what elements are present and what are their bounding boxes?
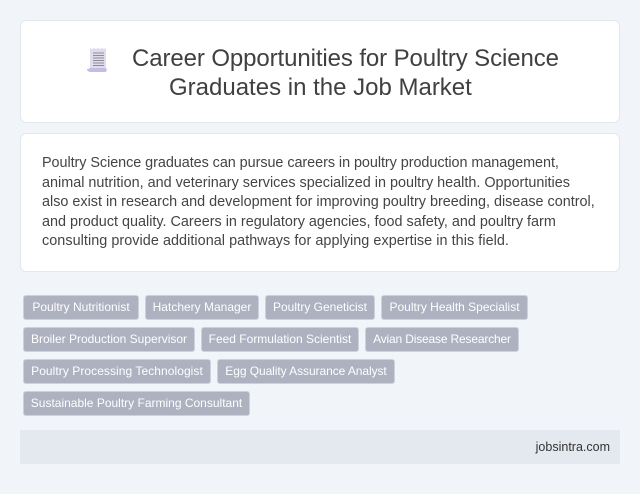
title: Career Opportunities for Poultry Science bbox=[132, 45, 559, 72]
tag bbox=[23, 295, 139, 320]
tag bbox=[145, 295, 259, 320]
footer site name: jobsintra.com bbox=[536, 440, 610, 454]
panel: career tags bbox=[23, 295, 528, 416]
tag bbox=[365, 327, 519, 352]
summary text bbox=[42, 155, 595, 249]
tag: Sustainable Poultry Farming Consultant bbox=[31, 396, 242, 410]
icon: document scroll bbox=[87, 48, 107, 72]
tag: Poultry Nutritionist bbox=[32, 300, 130, 314]
summary text: also exist in research and development for improving poultry breeding, disease control, bbox=[42, 194, 595, 210]
summary text: and product quality. Careers in regulatory agencies, food safety, and poultry farm bbox=[42, 214, 556, 230]
tag: Avian Disease Researcher bbox=[373, 332, 511, 346]
summary text: Poultry Science graduates can pursue careers in poultry production management, bbox=[42, 155, 559, 171]
panel: summary card bbox=[20, 133, 620, 272]
tag: Feed Formulation Scientist bbox=[209, 332, 351, 346]
tag: Poultry Processing Technologist bbox=[31, 364, 203, 378]
summary text: consulting provide additional pathways for applying expertise in this field. bbox=[42, 233, 509, 249]
tag bbox=[201, 327, 359, 352]
tag: Broiler Production Supervisor bbox=[31, 332, 187, 346]
summary text: animal nutrition, and veterinary services specialized in poultry health. Opportunities bbox=[42, 174, 570, 190]
footer bar bbox=[20, 430, 620, 464]
tag bbox=[23, 327, 195, 352]
panel: title card bbox=[20, 20, 620, 123]
tag bbox=[23, 359, 211, 384]
tag: Poultry Health Specialist bbox=[389, 300, 520, 314]
tag bbox=[381, 295, 528, 320]
tag: Hatchery Manager bbox=[153, 300, 251, 314]
title bbox=[132, 45, 559, 101]
tag: Egg Quality Assurance Analyst bbox=[225, 364, 387, 378]
tag bbox=[265, 295, 375, 320]
title: Graduates in the Job Market bbox=[169, 74, 472, 101]
tag: Poultry Geneticist bbox=[273, 300, 367, 314]
tag bbox=[217, 359, 395, 384]
tag bbox=[23, 391, 250, 416]
